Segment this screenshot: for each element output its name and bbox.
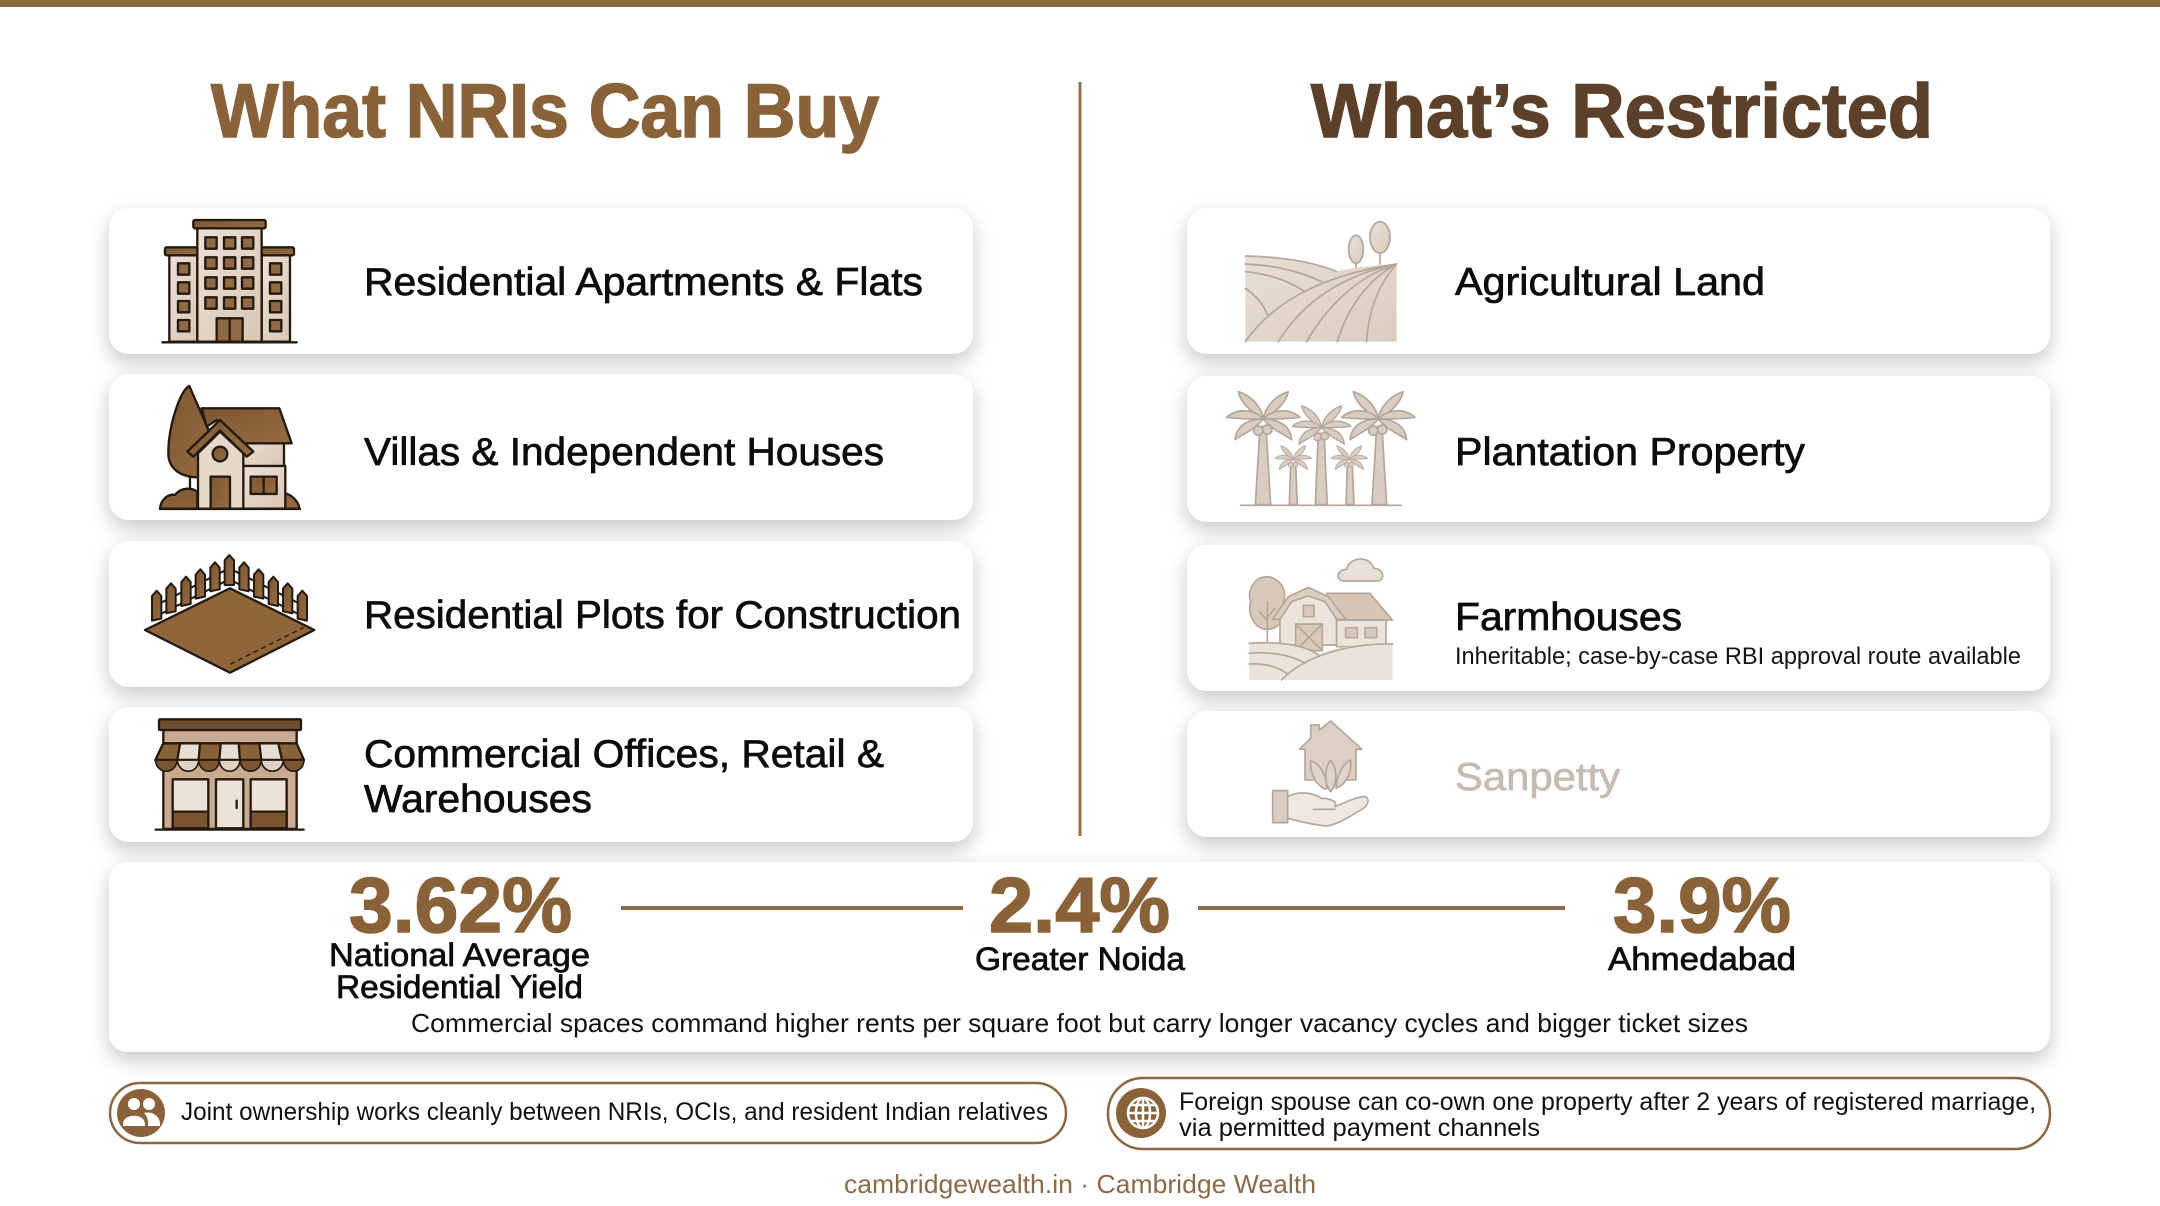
- connector line: [1198, 906, 1565, 910]
- label: Commercial Offices, Retail &: [364, 733, 884, 776]
- column divider: [1078, 82, 1082, 836]
- callout: joint ownership: [110, 1083, 1066, 1143]
- stat: greater noida: Greater Noida: [975, 941, 1185, 977]
- text: [1179, 1088, 2036, 1142]
- icon: farmhouse: [1249, 559, 1393, 680]
- card: residential apartments: [109, 208, 973, 354]
- heading: What NRIs Can Buy: What NRIs Can Buy: [211, 69, 879, 154]
- icon: palm trees: [1227, 392, 1415, 505]
- icon: apartment building: [162, 220, 297, 342]
- card: sanpetty: [1187, 711, 2050, 837]
- label group: Farmhouses: [1455, 596, 1682, 639]
- icon: storefront: [155, 719, 304, 830]
- icon: people: [117, 1089, 165, 1137]
- card: agricultural land: [1187, 208, 2050, 354]
- label: Warehouses: [364, 778, 592, 821]
- icon: farm fields: [1245, 222, 1397, 342]
- icon: villa with tree: [160, 386, 300, 509]
- label group: [1455, 596, 2021, 670]
- panel: rental yield statistics: [109, 861, 2050, 1052]
- label: Residential Apartments & Flats: [364, 261, 923, 304]
- icon: fenced plot: [145, 555, 314, 673]
- label: [364, 733, 884, 821]
- label: Villas & Independent Houses: [364, 431, 884, 474]
- stat: greater noida: [975, 861, 1185, 977]
- connector line: [621, 906, 963, 910]
- text: Foreign spouse can co-own one property after 2 years of registered marriage,: [1179, 1088, 2036, 1116]
- stat: national average: [329, 861, 590, 1005]
- panel: what NRIs can buy: [109, 208, 973, 842]
- card: villas: [109, 374, 973, 520]
- text: Joint ownership works cleanly between NRIs, OCIs, and resident Indian relatives: [181, 1098, 1048, 1126]
- panel: what's restricted: [1187, 208, 2050, 837]
- icon: globe: [1116, 1088, 1166, 1138]
- label: Plantation Property: [1455, 431, 1806, 474]
- stat: greater noida: 2.4%: [989, 861, 1170, 949]
- stat: national average: Residential Yield: [336, 969, 583, 1005]
- stat: national average: National Average: [329, 937, 590, 973]
- stat: ahmedabad: 3.9%: [1613, 861, 1791, 949]
- callout: foreign spouse: [1108, 1078, 2050, 1149]
- text: via permitted payment channels: [1179, 1114, 1540, 1142]
- card: residential plots: [109, 541, 973, 687]
- label: Residential Plots for Construction: [364, 594, 961, 637]
- label: Sanpetty: [1455, 756, 1621, 799]
- heading: What's Restricted: What’s Restricted: [1311, 69, 1933, 154]
- icon: hand holding house: [1273, 721, 1368, 826]
- note: commercial spaces: Commercial spaces command higher rents per square foot but carry longer vacancy cycles and bigger ticket sizes: [411, 1008, 1748, 1038]
- card: commercial: [109, 707, 973, 842]
- stat: ahmedabad: Ahmedabad: [1608, 941, 1796, 977]
- footer: cambridgewealth.in · Cambridge Wealth: [844, 1169, 1316, 1199]
- top accent bar: [0, 0, 2160, 7]
- card: farmhouses: [1187, 545, 2050, 691]
- label: Agricultural Land: [1455, 261, 1765, 304]
- label group: Inheritable; case-by-case RBI approval route available: [1455, 643, 2021, 670]
- stat: national average: 3.62%: [349, 861, 572, 949]
- card: plantation: [1187, 376, 2050, 522]
